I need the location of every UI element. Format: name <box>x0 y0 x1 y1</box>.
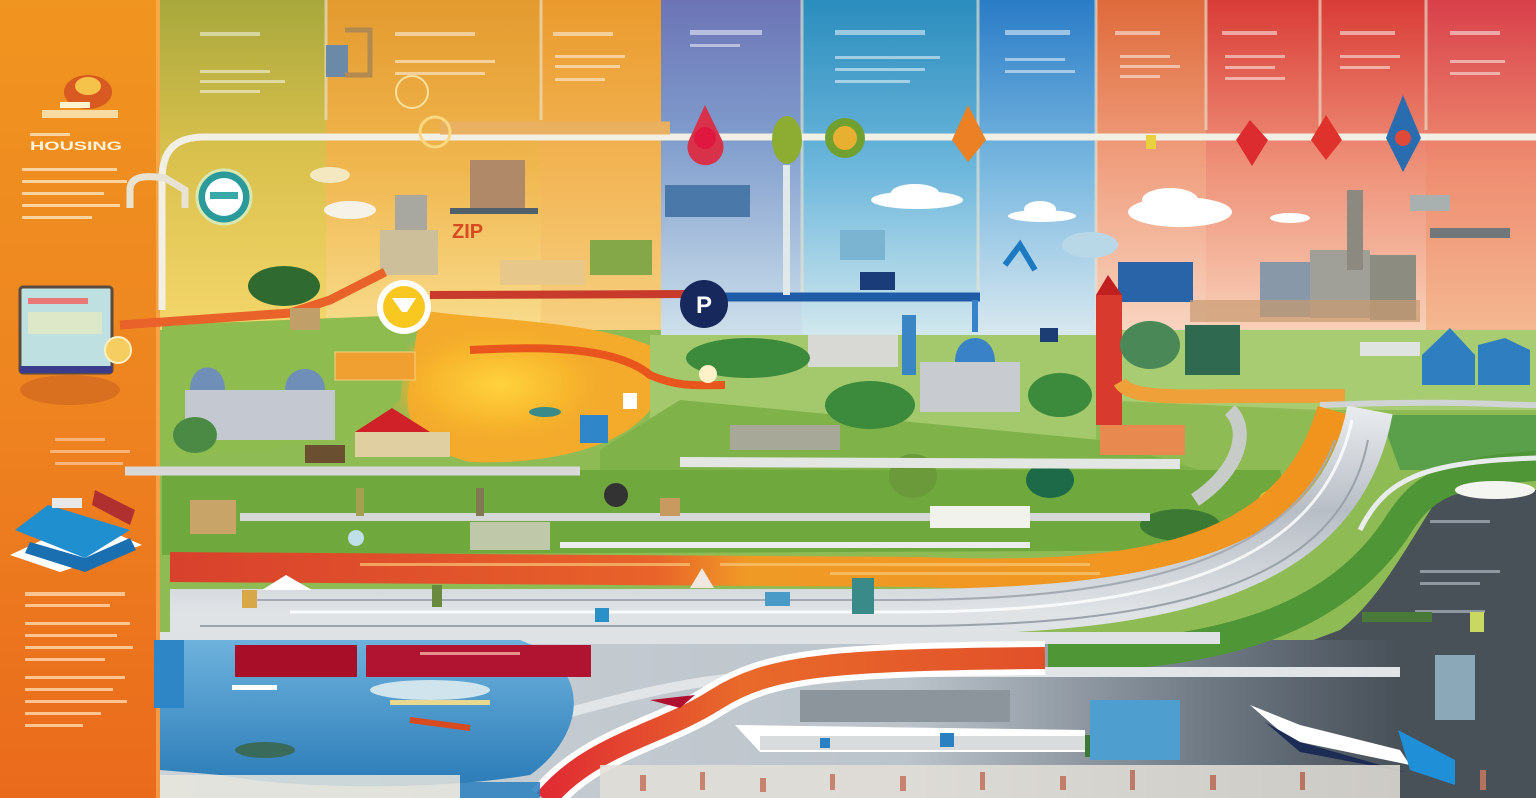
dark panel text <box>1362 481 1535 632</box>
central labels <box>335 352 840 450</box>
central glow area <box>162 310 660 462</box>
top white timeline <box>162 128 1536 310</box>
left column middle text <box>50 438 130 465</box>
band text lines <box>360 563 1100 575</box>
panel text placeholder lines <box>200 30 1505 93</box>
highway lines <box>200 420 1368 626</box>
skyline right <box>1118 190 1510 322</box>
highway small icons <box>242 568 874 622</box>
red curved road <box>545 658 1045 798</box>
left column lower text <box>25 592 133 727</box>
green bush <box>248 266 320 330</box>
top panel: red section <box>1096 0 1536 330</box>
panel dividers <box>326 0 1426 420</box>
dark red banner <box>235 645 591 677</box>
dark water panel right <box>1180 490 1536 798</box>
icon: parking marker: P <box>696 292 712 319</box>
orange winding road <box>470 348 725 385</box>
icon: parking marker <box>680 280 728 328</box>
water panel left <box>160 640 574 786</box>
bottom base <box>160 640 1400 798</box>
center lower platform <box>735 690 1180 760</box>
left government building <box>173 368 335 453</box>
orange main band <box>170 410 1332 573</box>
clouds <box>871 184 1310 227</box>
left column card: device <box>20 287 131 405</box>
grey highway band <box>170 410 1370 612</box>
blue tab <box>154 640 184 708</box>
capitol building <box>808 300 1058 412</box>
lower grey road <box>560 672 1400 715</box>
green land middle <box>162 330 1536 555</box>
red and blue road with P marker <box>120 272 980 328</box>
orange band right loop <box>1120 382 1345 396</box>
bottom sky strip <box>160 632 1220 644</box>
top left illustrations <box>310 30 652 285</box>
grey middle roads <box>125 403 1536 550</box>
icon: blue book stack <box>10 490 142 572</box>
ship lower right <box>1250 655 1475 785</box>
left column upper text <box>22 133 127 219</box>
top panel: blue section <box>661 0 1096 340</box>
top left illustrations: ZIP <box>452 221 483 243</box>
boats on water <box>232 680 695 758</box>
blue panel illustrations <box>665 165 1118 295</box>
icon: yellow funnel badge <box>377 280 431 334</box>
red roof house <box>305 408 450 463</box>
bottom crowd strip <box>160 765 1486 798</box>
far right house icons <box>1360 328 1530 385</box>
white road upper right <box>1360 458 1536 530</box>
small road icons <box>190 483 1287 546</box>
left orange column <box>0 0 160 798</box>
red tower <box>1096 275 1185 455</box>
icon: logo cloud <box>42 75 118 118</box>
timeline marker icons <box>687 95 1421 172</box>
green curved band <box>1048 466 1536 657</box>
column heading: HOUSING <box>30 139 122 153</box>
green trees middle <box>686 321 1240 541</box>
badge: round teal gauge <box>130 170 251 224</box>
top panel: olive and orange section <box>160 0 661 330</box>
